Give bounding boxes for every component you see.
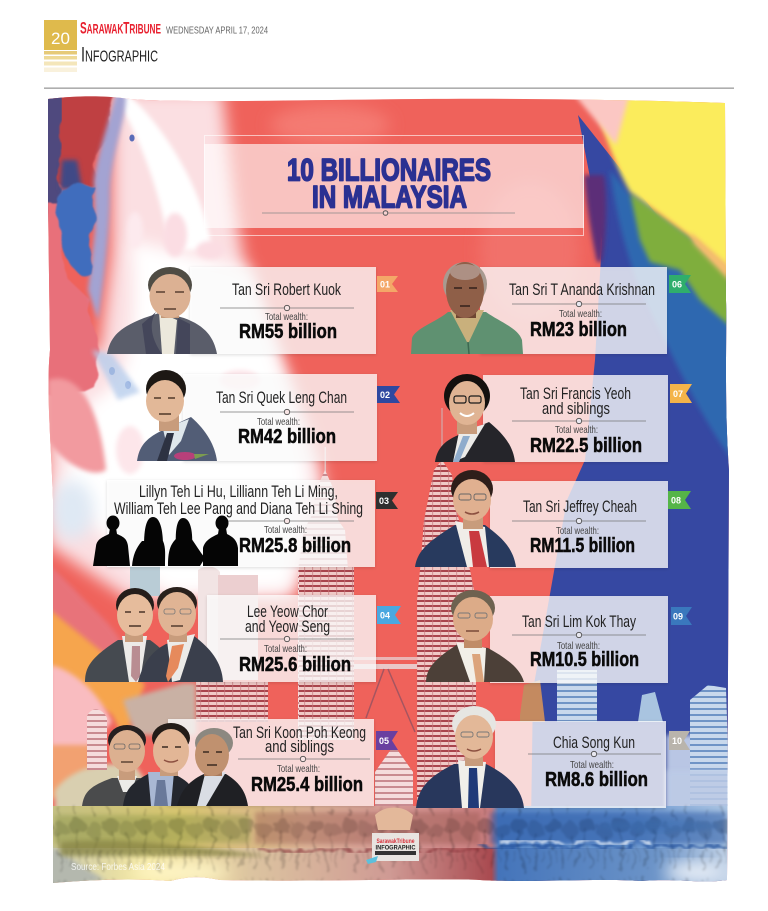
divider — [512, 518, 646, 524]
background: green band — [628, 193, 726, 327]
wealth value: RM22.5 billion — [530, 435, 642, 457]
wealth value: RM8.6 billion — [545, 769, 648, 791]
background: purple edge — [88, 92, 126, 320]
wealth label: Total wealth: — [559, 308, 602, 320]
divider — [225, 518, 354, 524]
wealth value: RM25.6 billion — [239, 654, 351, 676]
name: Tan Sri Lim Kok Thay — [522, 613, 637, 631]
central small tower — [375, 750, 413, 806]
name: Tan Sri T Ananda Krishnan — [509, 281, 655, 299]
portrait: sibling left — [82, 725, 168, 806]
card 07: Francis Yeoh — [435, 374, 668, 462]
background: pale blue left wash — [50, 480, 94, 540]
background: orange edge of yellow — [689, 233, 726, 282]
divider — [220, 409, 354, 415]
card 01: Robert Kuok — [107, 267, 376, 354]
wealth value: RM42 billion — [238, 426, 336, 448]
divider — [238, 756, 370, 762]
background: maroon wedge — [584, 175, 606, 262]
background: small blue drops — [109, 134, 135, 389]
wealth label: Total wealth: — [570, 759, 614, 771]
header: date: WEDNESDAY APRIL 17, 2024 — [166, 26, 268, 36]
wealth label: Total wealth: — [557, 640, 600, 652]
watercolour riverside strip — [53, 805, 728, 883]
header rule — [44, 88, 734, 89]
portrait: Lee Yeow Chor — [85, 588, 178, 682]
card 03: Teh siblings — [93, 480, 375, 567]
title text: 10 BILLIONAIRES — [287, 152, 491, 188]
wealth label: Total wealth: — [265, 311, 308, 323]
background: pink lower-left — [50, 665, 112, 760]
rank tag 03 — [376, 492, 398, 509]
title divider — [262, 211, 515, 215]
portrait: Chia Song Kun — [416, 706, 524, 808]
rank tag 02 — [377, 386, 400, 403]
name: Tan Sri Robert Kuok — [232, 281, 342, 299]
title text: IN MALAYSIA — [312, 178, 467, 214]
name second line: and siblings — [542, 400, 610, 418]
infographic logo stamp: SarawakTribune — [376, 839, 415, 845]
card 09: Lim Kok Thay — [426, 590, 668, 683]
background: white field — [60, 240, 310, 595]
wealth value: RM11.5 billion — [530, 535, 635, 557]
portrait: sibling right — [177, 728, 248, 806]
name: Lee Yeow Chor — [247, 603, 328, 621]
rank tag 05: 05 — [379, 736, 389, 746]
silhouettes of four siblings — [93, 516, 238, 566]
background: pale beige lower-left — [53, 761, 146, 806]
name: Tan Sri Quek Leng Chan — [216, 389, 347, 407]
card 10: Chia Song Kun — [416, 706, 666, 808]
rank tag 06 — [669, 275, 691, 293]
header: section title: INFOGRAPHIC — [81, 44, 158, 66]
name: Lillyn Teh Li Hu, Lilliann Teh Li Ming, — [139, 483, 338, 501]
rank tag 05 — [376, 731, 398, 750]
background: pale blue streak — [92, 350, 140, 400]
background: left pink patch — [48, 378, 106, 473]
portrait: sibling centre — [123, 723, 200, 806]
rank tag 03: 03 — [379, 496, 389, 506]
card 06: Ananda Krishnan — [411, 262, 667, 354]
divider — [528, 751, 661, 757]
title panel — [204, 136, 584, 236]
background: lower red — [44, 205, 100, 400]
background: top-left maroon — [48, 96, 114, 187]
name second line: and Yeow Seng — [245, 618, 330, 636]
wealth label: Total wealth: — [556, 525, 599, 537]
background: blue blob — [58, 185, 95, 273]
background: pink blotches — [116, 212, 260, 474]
infographic logo stamp: INFOGRAPHIC — [376, 846, 416, 852]
portrait: Quek Leng Chan — [137, 370, 217, 461]
rank tag 08: 08 — [671, 496, 681, 506]
divider — [220, 636, 354, 642]
rank tag 01 — [377, 276, 398, 292]
background: pink wash — [48, 90, 324, 600]
wealth label: Total wealth: — [264, 643, 307, 655]
wealth value: RM55 billion — [239, 321, 337, 343]
portrait: Robert Kuok — [107, 267, 217, 354]
wealth value: RM25.4 billion — [251, 774, 363, 796]
right Petronas tower — [417, 408, 476, 810]
right skyline buildings — [520, 670, 732, 815]
rank tag 09 — [671, 607, 692, 625]
rank tag 07 — [670, 384, 692, 403]
rank tag 01: 01 — [380, 280, 390, 290]
card 02: Quek Leng Chan — [137, 370, 377, 461]
divider — [512, 301, 646, 307]
portrait: Yeow Seng — [138, 587, 223, 682]
rank tag 07: 07 — [673, 389, 683, 399]
card 05: Koon Poh Keong — [82, 719, 374, 806]
wealth label: Total wealth: — [555, 424, 598, 436]
portrait: Ananda Krishnan — [411, 262, 523, 354]
wealth label: Total wealth: — [257, 416, 300, 428]
header: page number block — [44, 20, 77, 72]
wealth label: Total wealth: — [264, 524, 307, 536]
infographic logo stamp — [366, 833, 419, 864]
left tall buildings — [87, 566, 268, 770]
source note: Source: Forbes Asia 2024 — [71, 861, 165, 873]
background: blue-teal band — [610, 172, 728, 458]
background: blue right field — [530, 115, 740, 890]
header: newspaper name: SARAWAKTRIBUNE — [80, 18, 161, 38]
rank tag 10 — [669, 731, 690, 750]
name: Tan Sri Jeffrey Cheah — [523, 498, 637, 516]
background: dark violet edge — [48, 98, 62, 222]
divider — [220, 305, 354, 311]
wealth value: RM25.8 billion — [239, 535, 351, 557]
rank tag 06: 06 — [672, 280, 682, 290]
name second line: and siblings — [265, 738, 334, 756]
rank tag 10: 10 — [672, 736, 682, 746]
background: top pink swash — [574, 100, 631, 146]
name second line: William Teh Lee Pang and Diana Teh Li Shing — [114, 500, 363, 518]
rank tag 08 — [668, 491, 691, 509]
portrait: Lim Kok Thay — [426, 590, 524, 682]
wealth value: RM10.5 billion — [530, 649, 639, 671]
skybridge — [354, 657, 417, 732]
portrait: Jeffrey Cheah — [415, 470, 516, 567]
name: Chia Song Kun — [553, 734, 635, 752]
background: red band lower-left — [53, 568, 122, 652]
header: page number block: 20 — [51, 29, 70, 48]
card 04: Lee Yeow Chor and Yeow Seng — [85, 587, 376, 682]
card 08: Jeffrey Cheah — [415, 470, 668, 568]
rank tag 04: 04 — [380, 610, 390, 620]
background: white swash — [118, 92, 212, 250]
portrait: Francis Yeoh — [435, 374, 515, 462]
name: Tan Sri Francis Yeoh — [520, 385, 631, 403]
name: Tan Sri Koon Poh Keong — [233, 724, 366, 742]
divider — [512, 632, 646, 638]
divider — [512, 418, 646, 424]
background: yellow corner — [592, 100, 726, 270]
background: orange wash — [53, 610, 146, 728]
background: orange low-left — [50, 745, 90, 800]
wealth label: Total wealth: — [277, 763, 320, 775]
left Petronas tower — [298, 447, 354, 740]
rank tag 09: 09 — [673, 612, 683, 622]
wealth value: RM23 billion — [530, 319, 627, 341]
rank tag 02: 02 — [380, 390, 390, 400]
rank tag 04 — [377, 606, 401, 624]
background: navy patch — [60, 160, 82, 190]
